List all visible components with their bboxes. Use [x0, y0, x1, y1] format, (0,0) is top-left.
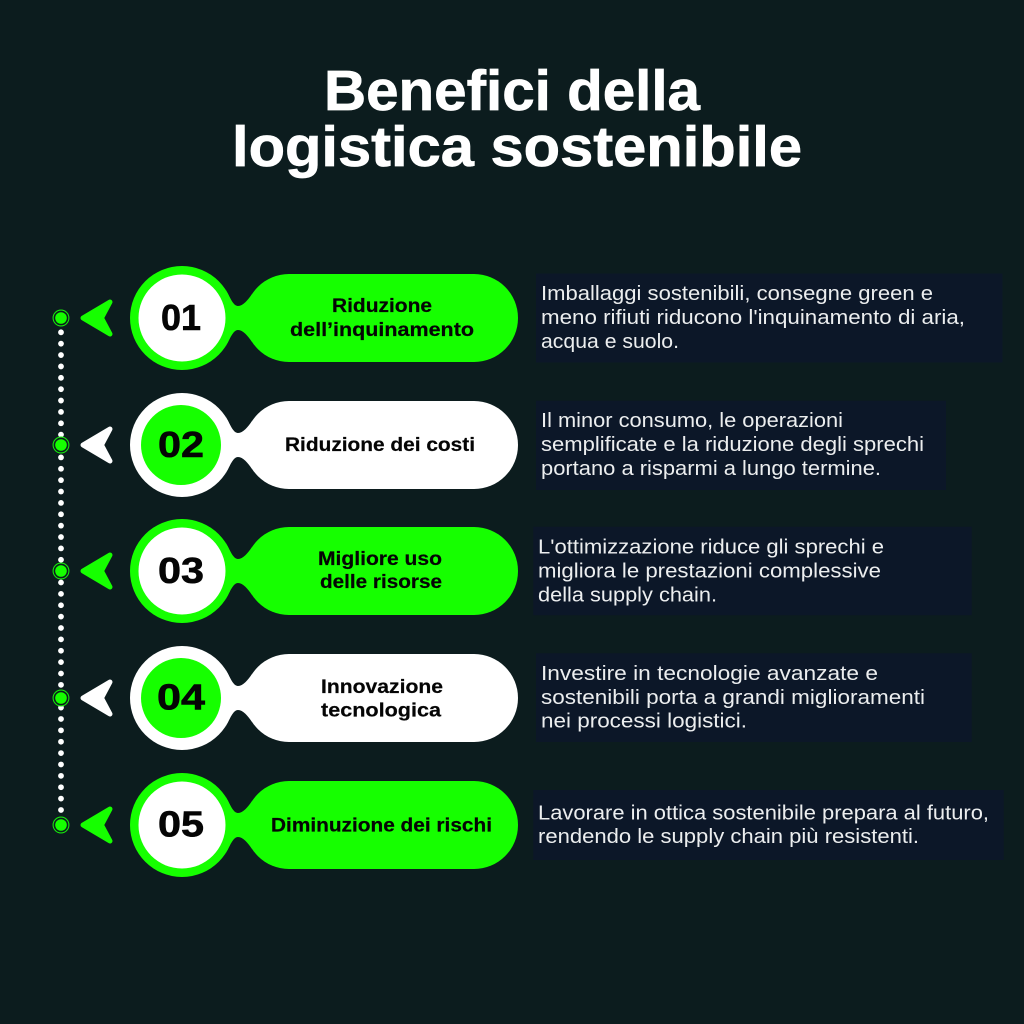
timeline node 2: [53, 437, 69, 453]
number circle 3: 03: [158, 550, 204, 591]
label 3: [318, 549, 442, 593]
description panel 4: Investire in tecnologie avanzate e: [541, 662, 878, 685]
arrow 5: [83, 809, 110, 841]
label 4: tecnologica: [321, 700, 441, 722]
title: [232, 59, 802, 179]
timeline node 1: [53, 310, 69, 326]
pill 1: [130, 266, 518, 370]
description panel 1: [536, 274, 1002, 362]
description panel 3: L'ottimizzazione riduce gli sprechi e: [538, 535, 884, 558]
label 4: Innovazione: [321, 677, 443, 698]
description panel 2: semplificate e la riduzione degli sprechi: [541, 433, 924, 456]
row 1: Riduzione dell'inquinamento: [53, 266, 518, 370]
arrow 3: [83, 555, 110, 587]
description panel 3: [533, 527, 972, 615]
number circle 5: [138, 782, 226, 868]
pill 5: [130, 773, 518, 877]
description panel 2: Il minor consumo, le operazioni: [541, 409, 843, 432]
timeline node 4: [53, 690, 69, 706]
number circle 2: 02: [158, 424, 204, 465]
number circle 1: 01: [161, 297, 201, 338]
description panel 3: della supply chain.: [538, 583, 717, 606]
row 3: Migliore uso delle risorse: [53, 519, 518, 623]
pill 3: [130, 519, 518, 623]
number circle 5: 05: [158, 804, 204, 844]
number circle 4: 04: [157, 676, 205, 718]
label 1: dell’inquinamento: [290, 320, 474, 341]
title: logistica sostenibile: [232, 115, 802, 179]
number circle 1: [138, 274, 226, 362]
description panel 3: migliora le prestazioni complessive: [538, 559, 881, 582]
row 2: Riduzione dei costi: [53, 393, 518, 497]
label 1: [290, 296, 474, 341]
arrow 2: [83, 429, 110, 461]
pill 4: [130, 646, 518, 750]
label 4: [321, 677, 443, 722]
number circle 3: [138, 528, 226, 614]
description panel 5: [533, 790, 1004, 860]
description panel 1: meno rifiuti riducono l'inquinamento di aria,: [541, 306, 965, 329]
description panel 4: [536, 653, 972, 742]
title: Benefici della: [324, 59, 701, 123]
description panel 4: sostenibili porta a grandi miglioramenti: [541, 686, 925, 709]
label 3: delle risorse: [320, 572, 442, 593]
description panel 5: Lavorare in ottica sostenibile prepara al futuro,: [538, 802, 989, 824]
description panel 4: nei processi logistici.: [541, 710, 747, 732]
pill 2: [130, 393, 518, 497]
label 3: Migliore uso: [318, 549, 442, 570]
arrow 4: [83, 682, 110, 714]
timeline: dotted line: [58, 332, 64, 810]
number circle 4: [141, 658, 221, 738]
label 5: Diminuzione dei rischi: [271, 816, 492, 836]
label 1: Riduzione: [332, 296, 432, 317]
timeline node 5: [53, 817, 69, 833]
row 4: Innovazione tecnologica: [53, 646, 518, 750]
description panel 2: [536, 401, 946, 490]
arrow 1: [83, 302, 110, 334]
number circle 2: [141, 405, 221, 485]
description panel 5: rendendo le supply chain più resistenti.: [538, 825, 919, 848]
label 2: Riduzione dei costi: [285, 435, 475, 456]
description panel 1: acqua e suolo.: [541, 330, 679, 353]
description panel 2: portano a risparmi a lungo termine.: [541, 457, 881, 480]
description panel 1: Imballaggi sostenibili, consegne green e: [541, 282, 933, 305]
timeline node 3: [53, 563, 69, 579]
row 5: Diminuzione dei rischi: [53, 773, 518, 877]
